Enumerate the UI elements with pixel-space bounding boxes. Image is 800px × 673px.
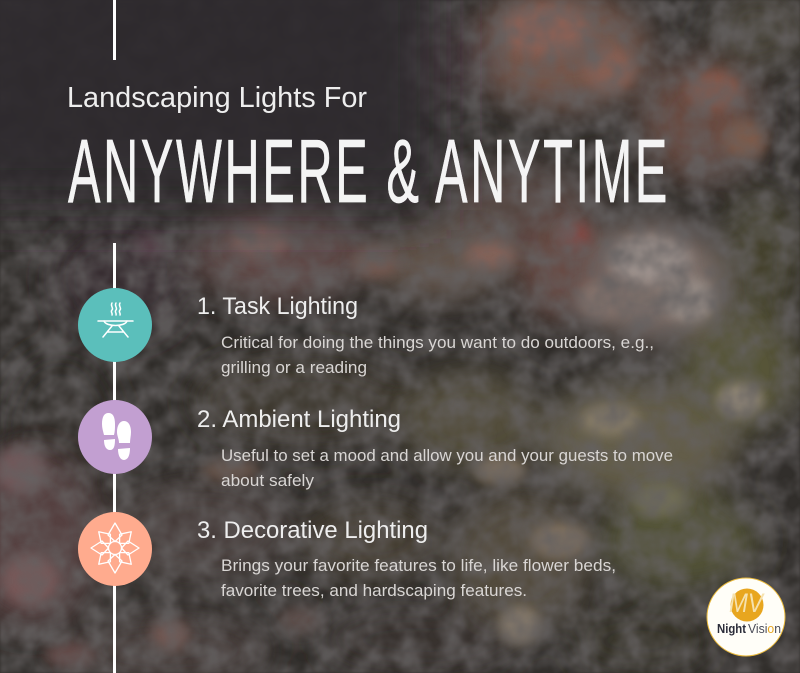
text: decorative lighting description: favorite trees, and hardscaping features. bbox=[221, 581, 527, 600]
logo: Night Vision bbox=[707, 578, 785, 656]
text: decorative lighting description bbox=[221, 556, 616, 600]
heading: 2. Ambient Lighting: 2. Ambient Lighting bbox=[197, 406, 401, 433]
text: task lighting description: grilling or a reading bbox=[221, 358, 367, 377]
logo: Night Vision: MV bbox=[729, 588, 766, 618]
top vertical line bbox=[113, 0, 116, 60]
icon: flower bbox=[78, 512, 152, 586]
heading: Landscaping Lights For: Landscaping Lights For bbox=[67, 82, 367, 114]
text: task lighting description bbox=[221, 333, 654, 377]
item 3: Decorative Lighting bbox=[197, 517, 616, 600]
text: ambient lighting description: about safely bbox=[221, 471, 314, 490]
logo: Night Vision: Night bbox=[717, 622, 747, 636]
text: ambient lighting description bbox=[221, 446, 673, 490]
icon: grill bbox=[78, 288, 152, 362]
heading: 1. Task Lighting: 1. Task Lighting bbox=[197, 293, 358, 320]
logo: Night Vision: Vision bbox=[748, 622, 781, 636]
item 2: Ambient Lighting bbox=[197, 406, 673, 490]
timeline vertical line bbox=[113, 243, 116, 673]
icon: footprints bbox=[78, 400, 152, 474]
text: decorative lighting description: Brings your favorite features to life, like flower beds, bbox=[221, 556, 616, 575]
heading: 3. Decorative Lighting: 3. Decorative Lighting bbox=[197, 517, 428, 544]
text: task lighting description: Critical for doing the things you want to do outdoors, e.g., bbox=[221, 333, 654, 352]
text: ambient lighting description: Useful to set a mood and allow you and your guests to move bbox=[221, 446, 673, 465]
item 1: Task Lighting bbox=[197, 293, 654, 377]
